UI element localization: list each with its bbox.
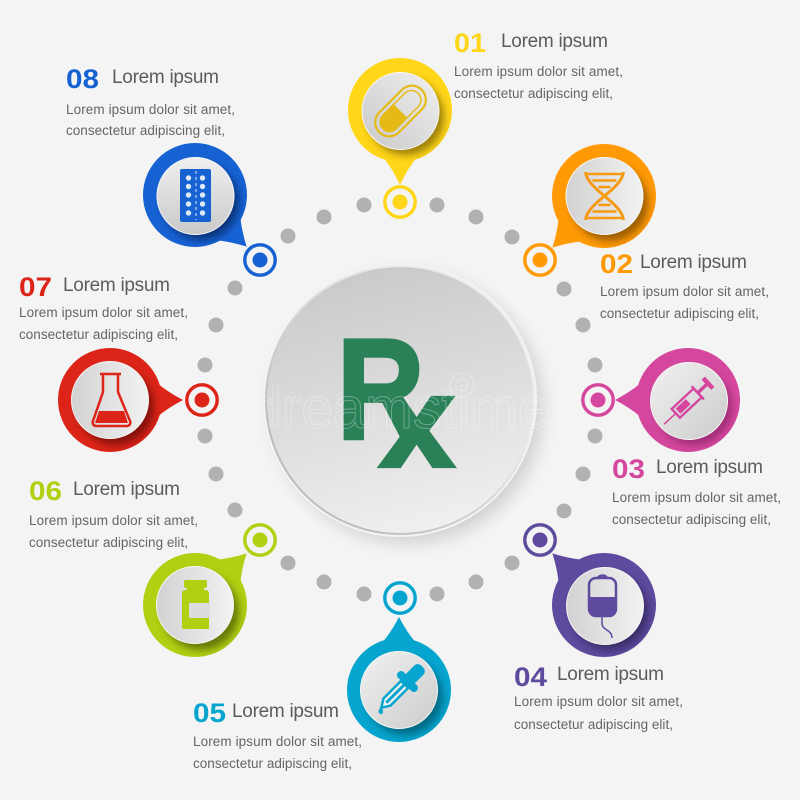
pin 07: flask bbox=[58, 348, 183, 452]
text block 01: Lorem ipsum bbox=[501, 31, 608, 52]
text block 04: Lorem ipsum dolor sit amet, bbox=[514, 694, 683, 709]
text block 02: consectetur adipiscing elit, bbox=[600, 306, 759, 321]
text block 03: 03 bbox=[612, 454, 645, 484]
dotted ring connector bbox=[198, 198, 602, 602]
text block 05: Lorem ipsum dolor sit amet, bbox=[193, 734, 362, 749]
text block 08: 08 bbox=[66, 64, 99, 94]
text block 03: consectetur adipiscing elit, bbox=[612, 512, 771, 527]
text block 08: Lorem ipsum dolor sit amet, bbox=[66, 102, 235, 117]
pin 08: blister pack bbox=[143, 143, 247, 247]
text block 04: consectetur adipiscing elit, bbox=[514, 717, 673, 732]
text block 01 bbox=[454, 28, 623, 101]
icon: IV bag bbox=[589, 575, 616, 638]
text block 03 bbox=[612, 454, 781, 527]
pin 06: bottle bbox=[143, 553, 247, 657]
text block 06: Lorem ipsum bbox=[73, 479, 180, 500]
text block 04: 04 bbox=[514, 662, 547, 692]
text block 02: Lorem ipsum dolor sit amet, bbox=[600, 284, 769, 299]
icon: blister pack bbox=[180, 169, 211, 222]
text block 06: Lorem ipsum dolor sit amet, bbox=[29, 513, 198, 528]
text block 03: Lorem ipsum bbox=[656, 457, 763, 478]
text block 07: consectetur adipiscing elit, bbox=[19, 327, 178, 342]
text block 06: consectetur adipiscing elit, bbox=[29, 535, 188, 550]
icon: syringe bbox=[658, 377, 714, 431]
icon: DNA helix bbox=[586, 172, 624, 220]
text block 04 bbox=[514, 662, 683, 732]
pin 05: dropper bbox=[347, 617, 451, 742]
text block 05 bbox=[193, 698, 362, 771]
text block 02: Lorem ipsum bbox=[640, 252, 747, 273]
text block 07: Lorem ipsum bbox=[63, 275, 170, 296]
watermark: dreamstime bbox=[250, 376, 550, 441]
icon: flask bbox=[93, 374, 130, 426]
text block 06 bbox=[29, 476, 198, 550]
pin 04: IV bag bbox=[552, 553, 656, 657]
ring marker 02 bbox=[525, 245, 555, 275]
text block 03: Lorem ipsum dolor sit amet, bbox=[612, 490, 781, 505]
text block 07: Lorem ipsum dolor sit amet, bbox=[19, 305, 188, 320]
ring marker 07 bbox=[187, 385, 217, 415]
Rx symbol: x bbox=[379, 349, 455, 495]
pin 02: DNA bbox=[552, 144, 656, 248]
text block 08 bbox=[66, 64, 235, 138]
ring marker 05 bbox=[385, 583, 415, 613]
text block 01: consectetur adipiscing elit, bbox=[454, 86, 613, 101]
text block 08: consectetur adipiscing elit, bbox=[66, 123, 225, 138]
text block 01: 01 bbox=[454, 28, 486, 58]
ring marker 06 bbox=[245, 525, 275, 555]
text block 06: 06 bbox=[29, 476, 62, 506]
ring marker 03 bbox=[583, 385, 613, 415]
ring marker 04 bbox=[525, 525, 555, 555]
ring marker 08 bbox=[245, 245, 275, 275]
icon: medicine bottle bbox=[182, 580, 210, 629]
text block 01: Lorem ipsum dolor sit amet, bbox=[454, 64, 623, 79]
central Rx disc bbox=[250, 263, 550, 542]
text block 07: 07 bbox=[19, 272, 52, 302]
icon: capsule bbox=[369, 80, 432, 142]
pin 03: syringe bbox=[615, 348, 740, 452]
Rx symbol: R bbox=[337, 310, 425, 470]
text block 02: 02 bbox=[600, 249, 633, 279]
pin 01: capsule bbox=[348, 58, 452, 185]
text block 07 bbox=[19, 272, 188, 342]
text block 05: Lorem ipsum bbox=[232, 701, 339, 722]
text block 05: 05 bbox=[193, 698, 226, 728]
text block 04: Lorem ipsum bbox=[557, 664, 664, 685]
text block 02 bbox=[600, 249, 769, 321]
text block 08: Lorem ipsum bbox=[112, 67, 219, 88]
ring marker 01 bbox=[385, 187, 415, 217]
icon: dropper bbox=[372, 657, 432, 717]
text block 05: consectetur adipiscing elit, bbox=[193, 756, 352, 771]
Rx symbol bbox=[337, 310, 455, 495]
